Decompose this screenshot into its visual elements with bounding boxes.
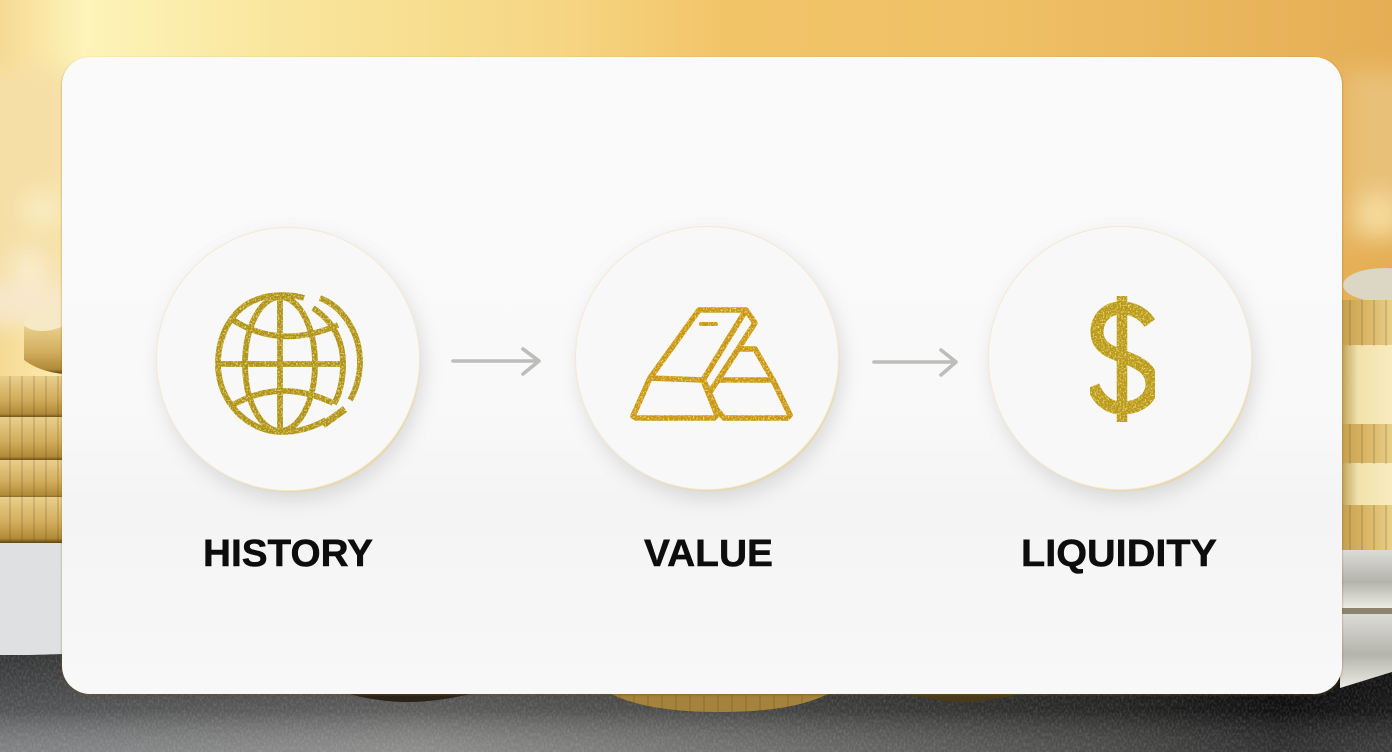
arrow: history to value <box>453 349 539 374</box>
panel: white card <box>62 57 1342 694</box>
label: liquidity: LIQUIDITY <box>1021 533 1217 575</box>
right coin stack <box>1340 268 1392 688</box>
circle: history <box>157 228 419 490</box>
label: history: HISTORY <box>203 533 373 575</box>
icon: globe <box>218 295 360 432</box>
icon: gold bars <box>633 310 790 418</box>
icon: dollar sign <box>1093 296 1152 422</box>
left cloth <box>0 540 64 655</box>
coin under panel <box>337 690 1039 712</box>
label: value: VALUE <box>644 533 773 575</box>
circle: liquidity <box>989 227 1251 489</box>
circle: value <box>576 227 838 489</box>
arrow: value to liquidity <box>874 350 956 375</box>
left coin stack <box>0 309 100 543</box>
